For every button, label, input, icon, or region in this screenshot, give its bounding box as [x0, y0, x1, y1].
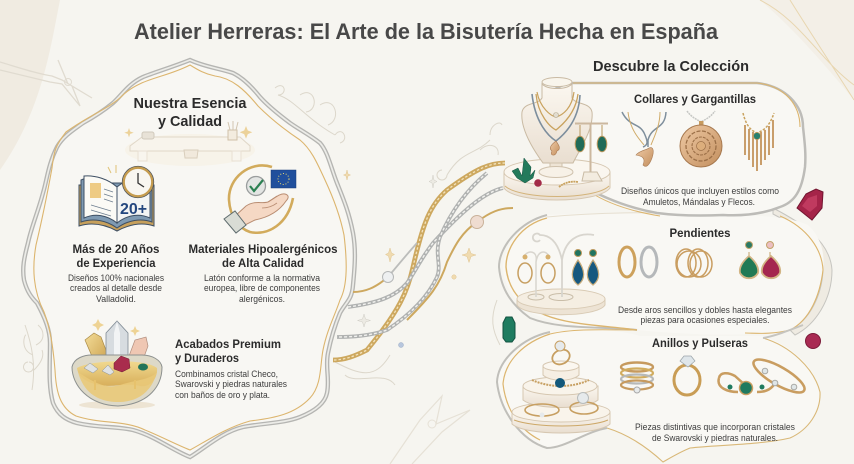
block: materiales: europea, libre de componentes	[204, 283, 320, 294]
necklace: amuleto	[622, 112, 666, 166]
block: acabados: con baños de oro y plata.	[175, 390, 270, 401]
block: experiencia: de Experiencia	[76, 256, 156, 270]
display: earrings on stands	[517, 234, 605, 315]
panel: collares y gargantillas: Diseños únicos que incluyen estilos como	[621, 186, 779, 197]
panel: anillos y pulseras: de Swarovski y piedras naturales.	[652, 433, 778, 444]
chains linking panels	[333, 163, 513, 360]
block: experiencia: creados al detalle desde	[70, 283, 162, 294]
block: materiales: alergénicos.	[239, 294, 285, 305]
block: acabados: Combinamos cristal Checo,	[175, 369, 278, 380]
display: pedestal	[504, 159, 610, 200]
panel: anillos y pulseras: Anillos y Pulseras	[652, 336, 748, 350]
bracelets	[719, 354, 809, 398]
earrings: hoops	[619, 247, 657, 277]
block: experiencia	[68, 242, 164, 305]
panel: anillos y pulseras	[497, 325, 820, 462]
block: materiales: Latón conforme a la normativa	[204, 273, 321, 284]
panel: collares y gargantillas	[540, 83, 805, 216]
block: materiales: de Alta Calidad	[222, 256, 304, 270]
panel: pendientes: Pendientes	[670, 226, 731, 240]
icon: hand with european flag	[224, 165, 296, 233]
block: acabados	[175, 337, 287, 401]
block: acabados: Acabados Premium	[175, 337, 281, 351]
sparkles	[344, 170, 476, 348]
heading: descubre la colección: Descubre la Colección	[593, 58, 749, 75]
heading: title: Atelier Herreras: El Arte de la Bisutería Hecha en España	[134, 19, 719, 44]
panel: collares y gargantillas: Collares y Gargantillas	[634, 92, 756, 106]
panel: collares y gargantillas: Amuletos, Mándalas y Flecos.	[643, 197, 755, 208]
earrings: double hoops	[676, 249, 712, 277]
panel: pendientes: Desde aros sencillos y dobles hasta elegantes	[618, 305, 792, 316]
ring: solitaire	[674, 356, 700, 395]
block: acabados: y Duraderos	[175, 351, 239, 365]
panel: pendientes: piezas para ocasiones especiales.	[640, 315, 770, 326]
heading: nuestra esencia: Nuestra Esencia	[134, 95, 247, 112]
panel: nuestra esencia frame	[23, 60, 355, 457]
heading: nuestra esencia: y Calidad	[158, 113, 222, 130]
icon: bowl with crystals	[72, 319, 162, 409]
gem: ruby	[797, 189, 823, 220]
gem: round ruby	[806, 334, 820, 348]
icon: workbench	[124, 121, 255, 166]
gem: emerald	[503, 317, 515, 342]
heading: nuestra esencia	[134, 95, 247, 130]
display: earring stand and gems	[512, 124, 608, 187]
necklace: mandala	[680, 111, 722, 167]
display: tiered ring stand	[512, 341, 610, 433]
thin chains and beads	[353, 208, 513, 320]
ring: stacked bands	[621, 362, 653, 393]
icon: open book with clock: 20+	[120, 201, 147, 218]
block: experiencia: Diseños 100% nacionales	[68, 273, 164, 284]
silver chain two	[337, 173, 487, 337]
block: experiencia: Más de 20 Años	[72, 242, 160, 256]
display: bust with necklaces	[522, 78, 592, 178]
block: materiales: Materiales Hipoalergénicos	[188, 242, 338, 256]
icon: open book with clock	[79, 165, 154, 231]
block: experiencia: Valladolid.	[96, 294, 136, 305]
block: materiales	[188, 242, 338, 305]
silver chain one	[348, 188, 503, 307]
panel: anillos y pulseras: Piezas distintivas que incorporan cristales	[635, 422, 795, 433]
earrings: gemstone drops	[740, 242, 780, 278]
decorative flourishes	[23, 86, 502, 390]
gold chain	[333, 163, 505, 360]
necklace: flecos	[743, 113, 774, 171]
block: acabados: Swarovski y piedras naturales	[175, 379, 287, 390]
panel: pendientes	[499, 208, 832, 335]
